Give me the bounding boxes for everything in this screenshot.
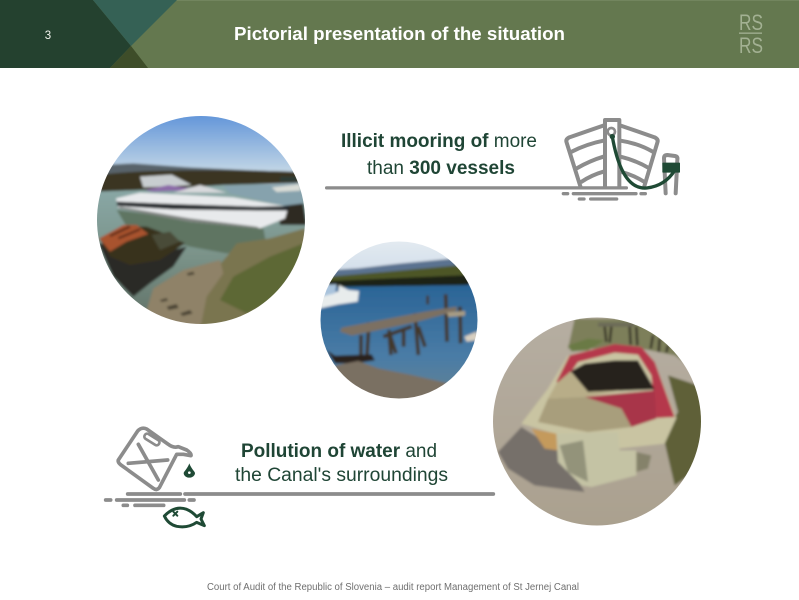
heading line 2: than 300 vessels — [367, 158, 515, 179]
hull outer — [521, 344, 676, 449]
heading line 1: Pollution of water and — [241, 441, 437, 462]
title: Pictorial presentation of the situation — [234, 24, 565, 44]
page number: 3 — [45, 30, 51, 42]
heading line 1: Illicit mooring of more — [341, 131, 537, 152]
icon: leaking canister and fish — [106, 428, 493, 527]
dark interior — [571, 360, 655, 392]
divider line: illicit mooring — [325, 186, 628, 190]
header bar — [0, 0, 799, 68]
callout: illicit mooring — [341, 131, 537, 179]
boat shadow — [498, 427, 585, 492]
shore rocks — [147, 260, 223, 330]
dead fish — [164, 508, 204, 527]
outboard motor — [556, 432, 636, 487]
callout: pollution — [235, 441, 448, 486]
oil drop — [184, 463, 195, 478]
photo: wrecked red boat on gravel — [493, 318, 701, 526]
shore grass — [201, 228, 304, 324]
pier deck — [340, 307, 457, 336]
pier posts — [361, 294, 461, 357]
logo: RS — [739, 10, 763, 35]
dark water under dinghy — [98, 243, 187, 297]
shore — [327, 350, 375, 363]
dinghy — [99, 227, 185, 265]
footer text: Court of Audit of the Republic of Slovenia – audit report Management of St Jernej Canal — [207, 582, 579, 593]
logo — [739, 10, 763, 58]
white boat — [320, 285, 359, 308]
heading line 2: the Canal's surroundings — [235, 465, 448, 486]
sand fill — [548, 371, 621, 399]
boat reflection — [117, 210, 267, 253]
red transom — [585, 390, 656, 427]
windscreen canopy — [140, 175, 192, 187]
photo: white motor boat moored in canal — [97, 116, 305, 324]
motor boat hull — [116, 193, 288, 228]
vegetation — [568, 318, 682, 362]
logo: RS — [739, 33, 763, 58]
photo: wooden pier in blue water — [320, 242, 478, 398]
small boat — [272, 184, 301, 192]
icon: moored boat with rope — [563, 120, 680, 199]
red rim — [556, 344, 675, 418]
